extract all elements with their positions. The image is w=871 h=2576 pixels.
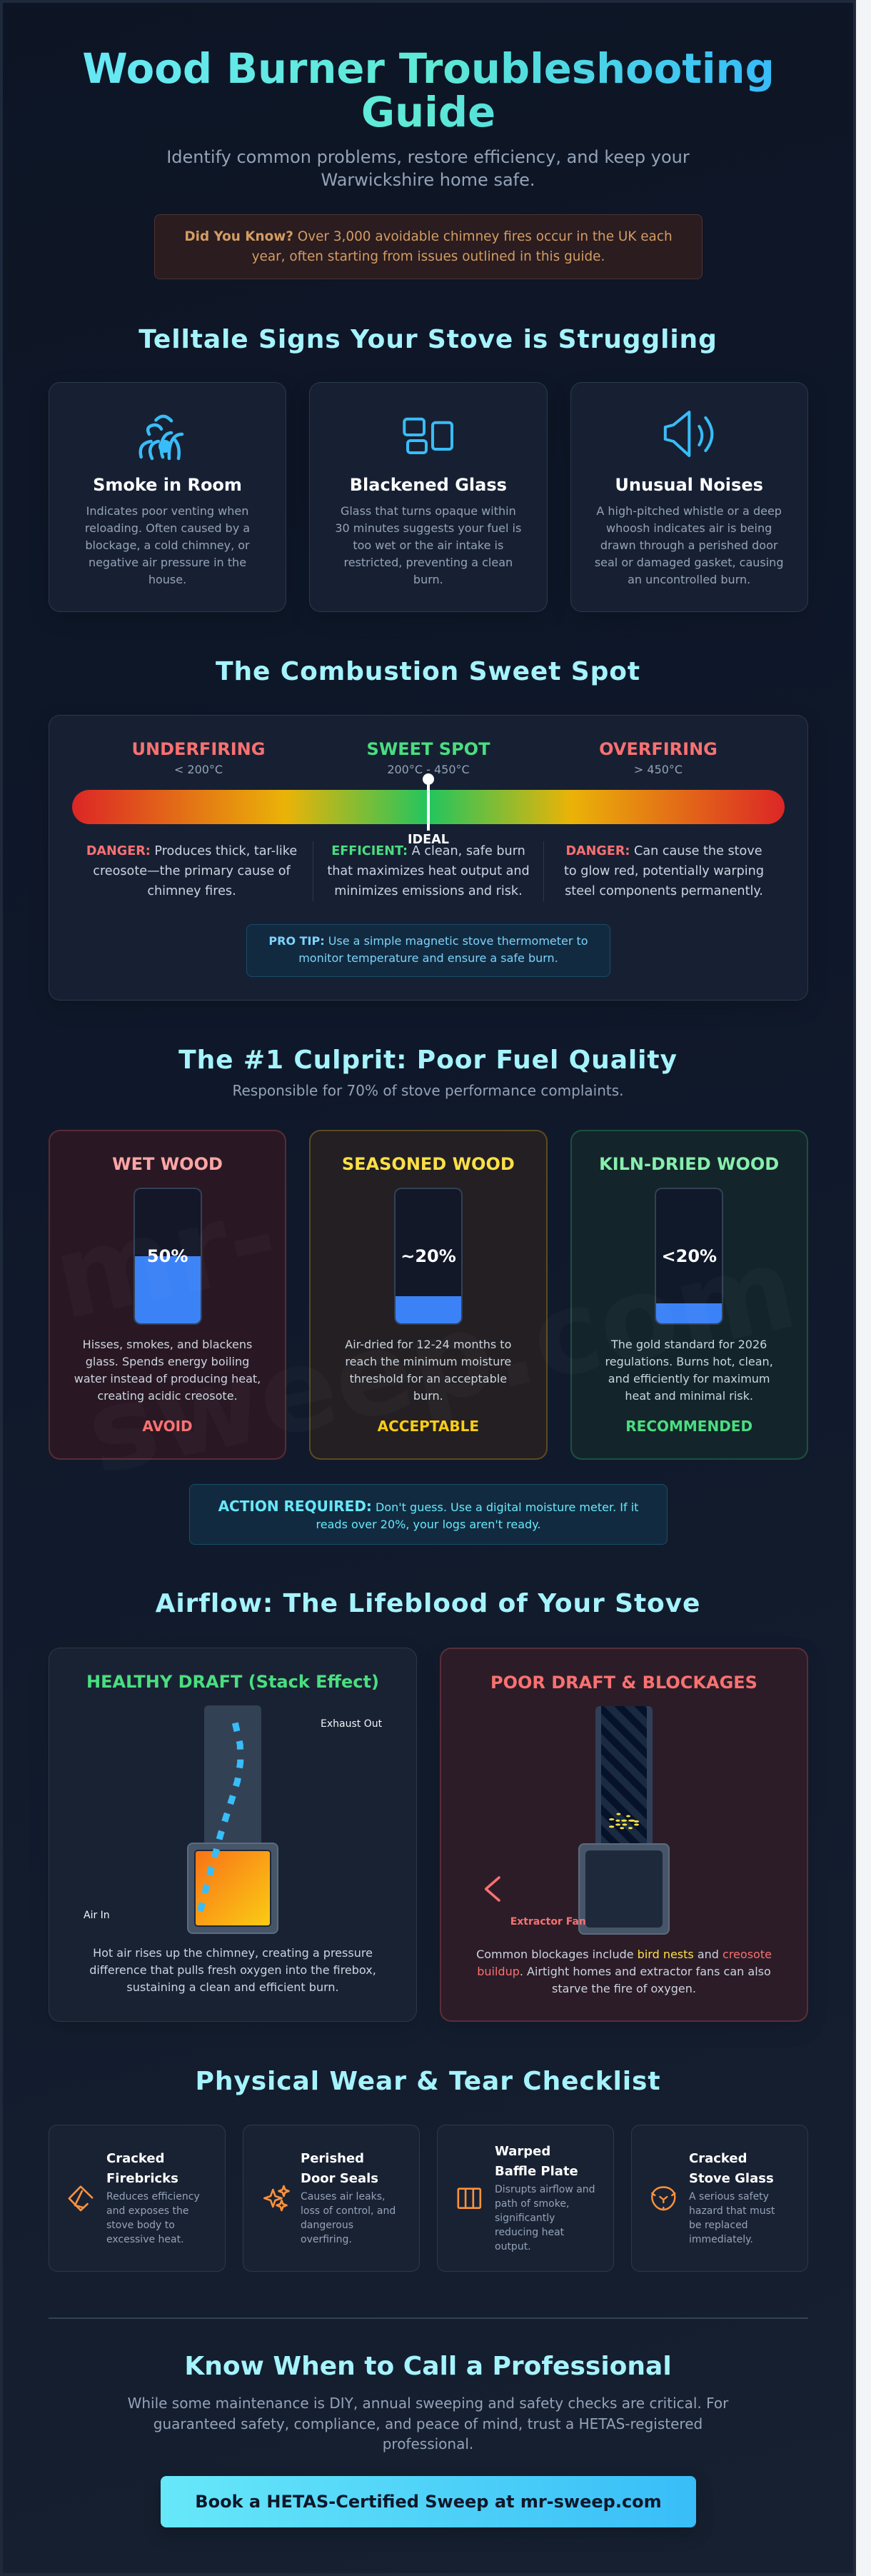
heading: telltale signs: Telltale Signs Your Stove is Struggling (139, 325, 718, 354)
item title: Cracked (689, 2151, 747, 2166)
fuel text: regulations. Burns hot, clean, (605, 1355, 773, 1368)
panel text: starve the fire of oxygen. (552, 1981, 696, 1995)
panel: blackened glass (309, 382, 548, 612)
verdict: RECOMMENDED (625, 1418, 752, 1435)
firebox (187, 1843, 278, 1934)
subtitle: Identify common problems, restore efficiency, and keep your (166, 147, 690, 167)
item title: Baffle Plate (495, 2164, 578, 2179)
text: overfiring danger (564, 844, 764, 898)
fuel title: KILN-DRIED WOOD (599, 1154, 779, 1174)
item text: output. (495, 2241, 531, 2252)
card text: Glass that turns opaque within (341, 504, 516, 518)
marker label: IDEAL (408, 833, 449, 847)
item text (689, 2191, 775, 2245)
icon: baffle plate (457, 2187, 481, 2209)
heading: wear and tear: Physical Wear & Tear Checklist (196, 2067, 660, 2096)
watermark: second line: sweep.com (76, 1221, 807, 1500)
fuel text: threshold for an acceptable (350, 1372, 507, 1385)
temperature bar (72, 790, 785, 824)
item text: Causes air leaks, (301, 2191, 386, 2202)
label: extractor fan: Extractor Fan (510, 1916, 586, 1928)
fuel text: Air-dried for 12-24 months to (345, 1338, 511, 1351)
title (49, 47, 808, 134)
verdict: AVOID (142, 1418, 193, 1435)
card text: too wet or the air intake is (353, 538, 503, 552)
label: sweet spot: SWEET SPOT (367, 739, 490, 759)
fuel text: water instead of producing heat, (74, 1372, 261, 1385)
panel: kiln-dried wood (570, 1130, 808, 1460)
moisture gauge: about 20% (394, 1188, 463, 1325)
callout: did you know: Did You Know? Over 3,000 avoidable chimney fires occur in the UK each (184, 229, 673, 244)
panel: poor draft (440, 1648, 808, 2022)
item title: Perished (301, 2151, 364, 2166)
item title: Cracked (106, 2151, 164, 2166)
fuel text: creating acidic creosote. (97, 1389, 238, 1403)
moisture gauge: 50%: 50% (147, 1246, 188, 1266)
text: underfiring danger (86, 844, 297, 898)
card text: 30 minutes suggests your fuel is (335, 521, 521, 535)
range: overfiring: > 450°C (634, 763, 683, 776)
fuel text: glass. Spends energy boiling (86, 1355, 249, 1368)
panel text (476, 1947, 772, 1995)
closing text (128, 2395, 728, 2452)
panel: smoke in room (49, 382, 286, 612)
text: underfiring danger: chimney fires. (147, 884, 236, 898)
fuel text (74, 1338, 261, 1403)
text: overfiring danger: steel components permanently. (565, 884, 763, 898)
panel: wet wood (49, 1130, 286, 1460)
text: overfiring danger: DANGER: Can cause the stove (565, 844, 762, 858)
item text: loss of control, and (301, 2205, 396, 2217)
card text: negative air pressure in the (89, 556, 246, 569)
callout: did you know: year, often starting from issues outlined in this guide. (252, 249, 605, 264)
moisture gauge: 50% (134, 1188, 202, 1325)
card text: burn. (413, 573, 443, 586)
item text: A serious safety (689, 2191, 769, 2202)
callout: pro tip: monitor temperature and ensure a safe burn. (298, 951, 558, 965)
item text (495, 2184, 595, 2252)
panel text: buildup. Airtight homes and extractor fans can also (477, 1964, 771, 1978)
title: Wood Burner Troubleshooting (82, 45, 775, 93)
panel: seasoned wood (309, 1130, 548, 1460)
card text: A high-pitched whistle or a deep (596, 504, 782, 518)
card text: seal or damaged gasket, causing (595, 556, 783, 569)
item title: Firebricks (106, 2171, 178, 2186)
card text: Indicates poor venting when (86, 504, 248, 518)
fuel text (605, 1338, 773, 1403)
fuel text: reach the minimum moisture (345, 1355, 511, 1368)
fuel text: Hisses, smokes, and blackens (83, 1338, 252, 1351)
panel text (89, 1946, 376, 1994)
callout: pro tip (246, 924, 610, 977)
item text: overfiring. (301, 2234, 352, 2245)
callout: action required: ACTION REQUIRED: Don't guess. Use a digital moisture meter. If it (218, 1498, 638, 1515)
fuel text: heat and minimal risk. (625, 1389, 753, 1403)
item text: Disrupts airflow and (495, 2184, 595, 2195)
text: underfiring danger: DANGER: Produces thick, tar-like (86, 844, 297, 858)
icon: cracked brick (69, 2185, 93, 2211)
button: book a sweep: Book a HETAS-Certified Sweep at mr-sweep.com (195, 2492, 662, 2512)
moisture gauge: under 20% (655, 1188, 723, 1325)
card title: Blackened Glass (350, 475, 507, 495)
fuel subheading: Responsible for 70% of stove performance complaints. (232, 1082, 624, 1099)
verdict: ACCEPTABLE (378, 1418, 479, 1435)
heading: combustion: The Combustion Sweet Spot (216, 657, 640, 686)
text: efficient: that maximizes heat output and (327, 864, 530, 878)
moisture gauge: about 20%: ~20% (401, 1246, 456, 1266)
icon: glass panes (403, 417, 453, 454)
card text (85, 504, 250, 586)
closing text: professional. (383, 2435, 473, 2452)
panel: warped baffle plate (437, 2125, 614, 2272)
text: efficient: minimizes emissions and risk. (334, 884, 523, 898)
fuel text: and efficiently for maximum (608, 1372, 770, 1385)
fuel title: SEASONED WOOD (342, 1154, 515, 1174)
card title: Smoke in Room (93, 475, 242, 495)
watermark: first line: mr- (43, 1168, 288, 1345)
label: exhaust out: Exhaust Out (321, 1718, 382, 1730)
callout: pro tip: PRO TIP: Use a simple magnetic stove thermometer to (268, 934, 588, 948)
chimney (204, 1705, 261, 1844)
card text: whoosh indicates air is being (606, 521, 772, 535)
fuel text: The gold standard for 2026 (611, 1338, 767, 1351)
text: underfiring danger: creosote—the primary cause of (93, 864, 291, 878)
card text: house. (148, 573, 186, 586)
panel text: difference that pulls fresh oxygen into the firebox, (89, 1963, 376, 1977)
subtitle: Warwickshire home safe. (321, 170, 535, 190)
label: overfiring: OVERFIRING (599, 739, 718, 759)
closing text: guaranteed safety, compliance, and peace of mind, trust a HETAS-registered (153, 2415, 703, 2432)
panel: cracked stove glass (631, 2125, 808, 2272)
card text: drawn through a perished door (600, 538, 777, 552)
item title (689, 2151, 774, 2186)
panel text: Hot air rises up the chimney, creating a pressure (93, 1946, 373, 1960)
item title: Door Seals (301, 2171, 378, 2186)
item text: excessive heat. (106, 2234, 184, 2245)
heading: fuel quality: The #1 Culprit: Poor Fuel Quality (178, 1046, 678, 1075)
button: book a sweep (161, 2476, 696, 2527)
heading: airflow: Airflow: The Lifeblood of Your Stove (156, 1589, 700, 1618)
panel: healthy draft (49, 1648, 417, 2022)
label: underfiring: UNDERFIRING (132, 739, 265, 759)
item text: stove body to (106, 2220, 175, 2231)
panel text: Common blockages include bird nests and creosote (476, 1947, 772, 1961)
card text: reloading. Often caused by a (85, 521, 250, 535)
icon: cracked glass (651, 2186, 675, 2211)
item text: significantly (495, 2212, 555, 2224)
item title: Stove Glass (689, 2171, 774, 2186)
callout: action required: reads over 20%, your logs aren't ready. (316, 1518, 540, 1531)
item title: Warped (495, 2144, 550, 2159)
title: Guide (361, 89, 495, 136)
icon: speaker (664, 411, 714, 457)
card title: Unusual Noises (615, 475, 763, 495)
firebox (578, 1843, 670, 1935)
callout: action required (189, 1484, 668, 1545)
fuel title: WET WOOD (112, 1154, 223, 1174)
item text: path of smoke, (495, 2198, 569, 2210)
subtitle (166, 147, 690, 190)
icon: bird nest and fan chevron (484, 1813, 639, 1902)
callout: did you know (154, 214, 703, 279)
panel: combustion gauge (49, 715, 808, 1001)
item text: and exposes the (106, 2205, 189, 2217)
item title (106, 2151, 178, 2186)
blocked chimney (595, 1706, 653, 1845)
item text: immediately. (689, 2234, 753, 2245)
range: underfiring: < 200°C (174, 763, 223, 776)
panel title: POOR DRAFT & BLOCKAGES (490, 1673, 757, 1693)
card text (335, 504, 521, 586)
text: efficient (327, 844, 530, 898)
range: sweet spot: 200°C - 450°C (387, 763, 470, 776)
item text: reducing heat (495, 2227, 564, 2238)
label: air in: Air In (84, 1910, 110, 1921)
marker: ideal (423, 773, 434, 831)
text: efficient: EFFICIENT: A clean, safe burn (331, 844, 525, 858)
heading: call a professional: Know When to Call a Professional (184, 2352, 672, 2381)
text: overfiring danger: to glow red, potentially warping (564, 864, 764, 878)
icon: smoke (139, 414, 184, 460)
moisture gauge: under 20%: <20% (662, 1246, 717, 1266)
panel: unusual noises (570, 382, 808, 612)
closing text: While some maintenance is DIY, annual sweeping and safety checks are critical. For (128, 2395, 728, 2412)
item text: hazard that must (689, 2205, 775, 2217)
item title (495, 2144, 578, 2179)
item text: dangerous (301, 2220, 353, 2231)
card text: blockage, a cold chimney, or (85, 538, 250, 552)
panel text: sustaining a clean and efficient burn. (126, 1980, 339, 1994)
panel: perished door seals (243, 2125, 420, 2272)
panel: cracked firebricks (49, 2125, 226, 2272)
card text: an uncontrolled burn. (628, 573, 750, 586)
panel title: HEALTHY DRAFT (Stack Effect) (86, 1672, 379, 1692)
card text: restricted, preventing a clean (344, 556, 513, 569)
airflow path (197, 1723, 244, 1913)
item title (301, 2151, 378, 2186)
item text (301, 2191, 396, 2245)
fuel text (345, 1338, 511, 1403)
card text (595, 504, 783, 586)
icon: sparkles (263, 2185, 290, 2211)
item text: Reduces efficiency (106, 2191, 200, 2202)
fuel text: burn. (413, 1389, 443, 1403)
item text (106, 2191, 200, 2245)
item text: be replaced (689, 2220, 748, 2231)
